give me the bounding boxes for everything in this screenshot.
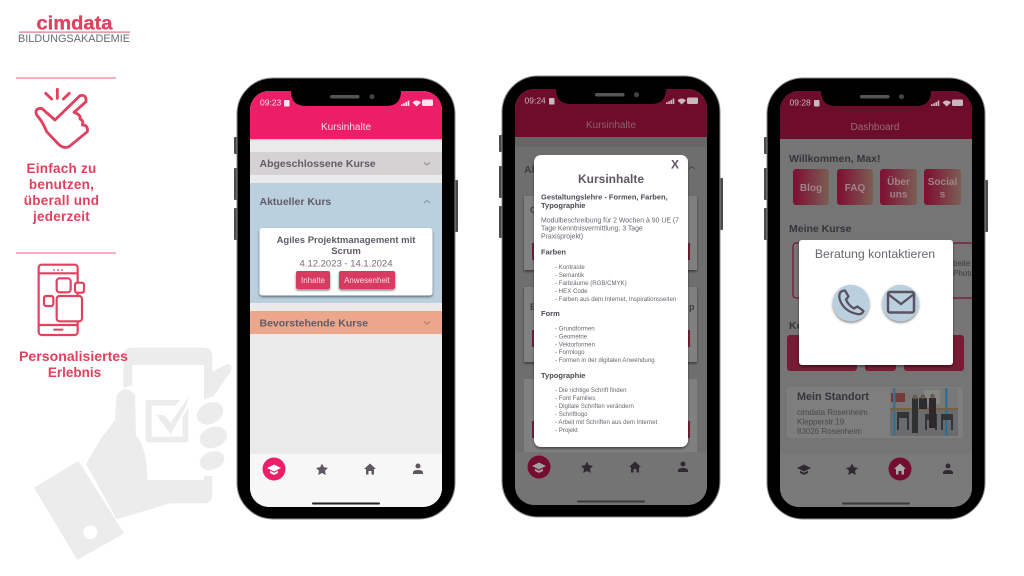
dimmed screen: G: [530, 205, 537, 215]
dimmed dashboard: Meine Kurse: [789, 223, 852, 235]
logo: cimdata: [36, 14, 113, 34]
icon: phone with tiles: [39, 265, 84, 335]
dialog: Kursinhalte: - Grundformen: [555, 326, 595, 332]
text: einfach zu benutzen: jederzeit: [32, 209, 90, 224]
bottom navigation: [250, 454, 442, 507]
tiles: Blog FAQ Über uns Socials: Social: [928, 177, 957, 188]
text: personalisiertes erlebnis: Personalisiertes: [19, 349, 128, 364]
dialog: Kursinhalte: - Farbräume (RGB/CMYK): [555, 280, 627, 287]
logo: [18, 14, 130, 45]
dimmed dashboard: [780, 91, 983, 507]
dialog: Kursinhalte: Kursinhalte: [578, 172, 644, 186]
tiles: Blog FAQ Über uns Socials: Blog: [800, 183, 822, 194]
photo: people at a table: [890, 388, 958, 436]
icon: mail button: [882, 285, 919, 321]
dialog: Kursinhalte: Tage Kenntnisvermittlung; 3 Tage: [541, 226, 643, 232]
icon: tapping hand: [36, 89, 87, 147]
notch and status bar: 09:23: [260, 98, 282, 108]
section: Abgeschlossene Kurse: Abgeschlossene Kurse: [260, 158, 376, 170]
button: Inhalte: Inhalte: [301, 276, 326, 285]
card: Mein Standort: 83026 Rosenheim: [797, 427, 862, 436]
dialog: Kursinhalte: - Geometrie: [555, 334, 588, 340]
text: einfach zu benutzen: überall und: [24, 193, 99, 208]
icon: phone button: [833, 285, 869, 321]
notch and status bar: 09:28: [790, 98, 811, 108]
dialog: Kursinhalte: Typographie: [541, 371, 585, 380]
dimmed screen: [515, 89, 707, 505]
dialog: Beratung kontaktieren: [799, 240, 953, 365]
dimmed dashboard: beite: [953, 259, 971, 268]
app header: Kursinhalte: [321, 122, 371, 133]
dialog: Kursinhalte: Praxisprojekt): [541, 234, 583, 240]
logo: BILDUNGSAKADEMIE: [18, 33, 130, 45]
card: Mein Standort: Mein Standort: [797, 391, 869, 403]
dialog: Kursinhalte: - Schriftlogo: [555, 411, 588, 418]
notch and status bar: [790, 91, 963, 108]
dialog: Kursinhalte: - Die richtige Schrift finden: [555, 387, 626, 394]
app header: [250, 91, 442, 140]
course card: 4.12.2023 - 14.1.2024: [300, 258, 392, 270]
text: einfach zu benutzen: Einfach zu: [26, 161, 97, 176]
notch and status bar: [260, 91, 433, 108]
card: Mein Standort: Klepperstr.19: [797, 418, 845, 426]
dialog: Kursinhalte: - Farben aus dem Internet, Inspirationsseiten: [555, 296, 676, 303]
section: Abgeschlossene Kurse: [250, 152, 442, 175]
dialog: Kursinhalte: Gestaltungslehre - Formen, Farben,: [541, 192, 668, 202]
button: Anwesenheit: Anwesenheit: [344, 276, 391, 285]
dialog: Kursinhalte: - Vektorformen: [555, 342, 595, 348]
screen: course list: [250, 91, 442, 507]
text: einfach zu benutzen: [24, 161, 99, 224]
course card: Scrum: [331, 246, 361, 257]
dialog: Kursinhalte: Farben: [541, 248, 566, 256]
button: Inhalte: [296, 271, 330, 289]
dialog: Kursinhalte: - Font Families: [555, 395, 595, 402]
dimmed screen: E: [530, 302, 536, 312]
dialog: Kursinhalte: - HEX Code: [555, 288, 588, 295]
dialog: Kursinhalte: - Kontraste: [555, 264, 585, 271]
tiles: Blog FAQ Über uns Socials: Über: [887, 175, 910, 188]
phone 2: course content dialog: [499, 76, 723, 517]
section: Bevorstehende Kurse: Bevorstehende Kurse: [260, 318, 368, 330]
panel: einfach zu benutzen: [16, 78, 116, 224]
card: Mein Standort: [787, 387, 963, 438]
tiles: Blog FAQ Über uns Socials: uns: [890, 190, 908, 200]
dimmed dashboard: Dashboard: [851, 122, 899, 133]
dimmed screen: p: [689, 302, 695, 312]
dialog: Kursinhalte: - Formlogo: [555, 349, 585, 356]
section: Aktueller Kurs: [250, 183, 442, 303]
panel: personalisiertes erlebnis: [16, 252, 128, 380]
dialog: Kursinhalte: Form: [541, 309, 560, 318]
bottom navigation dimmed: [780, 454, 972, 507]
dialog: Kursinhalte: - Projekt: [555, 427, 578, 434]
text: einfach zu benutzen: benutzen,: [29, 177, 94, 192]
dialog: Kursinhalte: [534, 155, 688, 447]
card: Mein Standort: cimdata Rosenheim: [797, 408, 868, 417]
tiles: Blog FAQ Über uns Socials: FAQ: [845, 183, 865, 194]
tiles: Blog FAQ Über uns Socials: s: [940, 190, 946, 200]
dialog: Kursinhalte: Modulbeschreibung für 2 Wochen à 90 UE (7: [541, 218, 679, 224]
course card: Agiles Projektmanagement mit: [277, 235, 416, 246]
bottom navigation dimmed: [515, 452, 707, 505]
dimmed screen: Kursinhalte: [586, 120, 636, 131]
dialog: Kursinhalte: Typographie: [541, 201, 585, 210]
dialog: Kursinhalte: - Arbeit mit Schriften aus dem Internet: [555, 419, 658, 426]
phone 3: dashboard with contact dialog: [764, 78, 988, 519]
watermark: hand holding phone: [34, 348, 231, 560]
notch and status bar: [524, 89, 698, 106]
text: personalisiertes erlebnis: Erlebnis: [48, 365, 101, 380]
dialog: Beratung kontaktieren: Beratung kontaktieren: [815, 247, 935, 261]
dimmed dashboard: Ko: [789, 320, 803, 332]
dialog: Kursinhalte: X: [671, 158, 679, 172]
dimmed dashboard: Willkommen, Max!: [789, 153, 881, 165]
notch and status bar: 09:24: [524, 96, 546, 106]
text: personalisiertes erlebnis: [19, 349, 128, 380]
dimmed screen: Al: [524, 164, 535, 176]
dialog: Kursinhalte: - Formen in der digitalen Anwendung: [555, 357, 655, 364]
tiles: Blog FAQ Über uns Socials: [793, 169, 961, 205]
course card: [260, 228, 432, 296]
dimmed dashboard: Photo: [953, 269, 974, 278]
section: Aktueller Kurs: Aktueller Kurs: [260, 196, 331, 208]
dialog: Kursinhalte: - Digitale Schriften verändern: [555, 403, 634, 410]
button: Anwesenheit: [339, 271, 395, 289]
section: Bevorstehende Kurse: [250, 311, 442, 334]
dialog: Kursinhalte: - Semantik: [555, 272, 585, 279]
phone 1: Kursinhalte list: [234, 78, 458, 519]
